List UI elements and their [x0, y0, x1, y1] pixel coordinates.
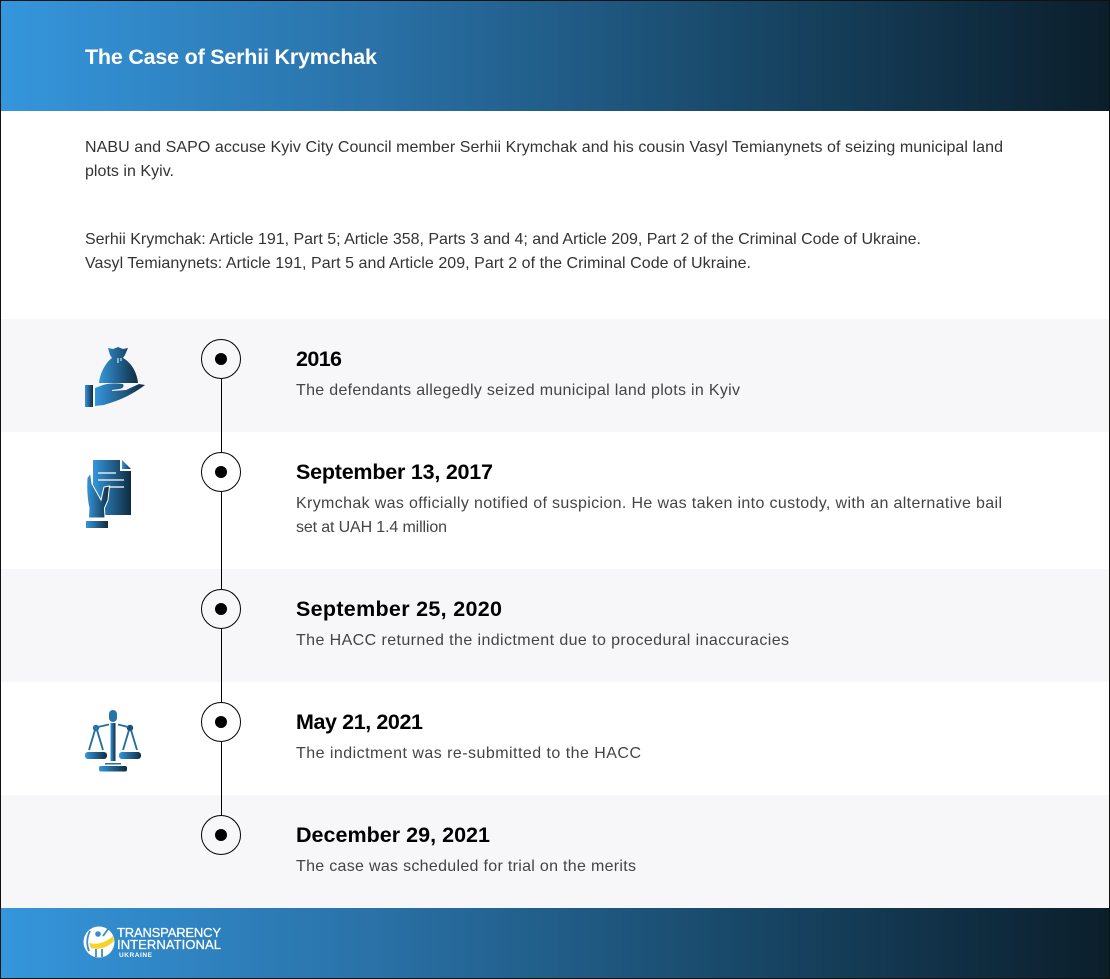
charges text: Serhii Krymchak: Article 191, Part 5; Article 358, Parts 3 and 4; and Article 209, Part 2 of the Criminal Code of Ukraine. [85, 231, 921, 248]
event: September 13, 2017: September 13, 2017 [296, 460, 493, 484]
event: September 25, 2020 [296, 597, 789, 649]
header band [0, 0, 1110, 111]
footer band [0, 908, 1110, 979]
logo: Transparency International Ukraine [84, 925, 221, 959]
event: 2016: The defendants allegedly seized municipal land plots in Kyiv [296, 382, 740, 399]
charges text [85, 231, 921, 272]
event: September 13, 2017 [296, 460, 1002, 536]
event: December 29, 2021: December 29, 2021 [296, 823, 490, 847]
timeline axis [202, 340, 240, 854]
event: May 21, 2021: The indictment was re-submitted to the HACC [296, 745, 641, 762]
intro text: NABU and SAPO accuse Kyiv City Council member Serhii Krymchak and his cousin Vasyl Temianynets of seizing municipal land [85, 139, 1003, 156]
event: May 21, 2021: May 21, 2021 [296, 710, 423, 734]
logo: Transparency International Ukraine: UKRAINE [119, 952, 153, 959]
event: September 13, 2017: Krymchak was officially notified of suspicion. He was taken into custody, with an alternative bail [296, 495, 1002, 512]
logo: Transparency International Ukraine: INTERNATIONAL [117, 937, 221, 952]
intro text [85, 139, 1003, 180]
intro text: plots in Kyiv. [85, 163, 174, 180]
row backgrounds [0, 319, 1110, 908]
icon: hand holding document [86, 460, 131, 528]
event: December 29, 2021: The case was scheduled for trial on the merits [296, 858, 636, 875]
event: May 21, 2021 [296, 710, 641, 762]
event: December 29, 2021 [296, 823, 636, 875]
title: The Case of Serhii Krymchak [85, 45, 377, 69]
event: September 25, 2020: September 25, 2020 [296, 597, 502, 621]
charges text: Vasyl Temianynets: Article 191, Part 5 and Article 209, Part 2 of the Criminal Code of Ukraine. [85, 255, 751, 272]
event: September 25, 2020: The HACC returned the indictment due to procedural inaccuracies [296, 632, 789, 649]
event: 2016: 2016 [296, 347, 342, 371]
event: 2016 [296, 347, 740, 399]
logo: Transparency International Ukraine: TRANSPARENCY [117, 925, 221, 940]
event: September 13, 2017: set at UAH 1.4 million [296, 519, 447, 536]
icon: money bag on hand [85, 347, 145, 407]
icon: scales of justice [85, 710, 141, 772]
